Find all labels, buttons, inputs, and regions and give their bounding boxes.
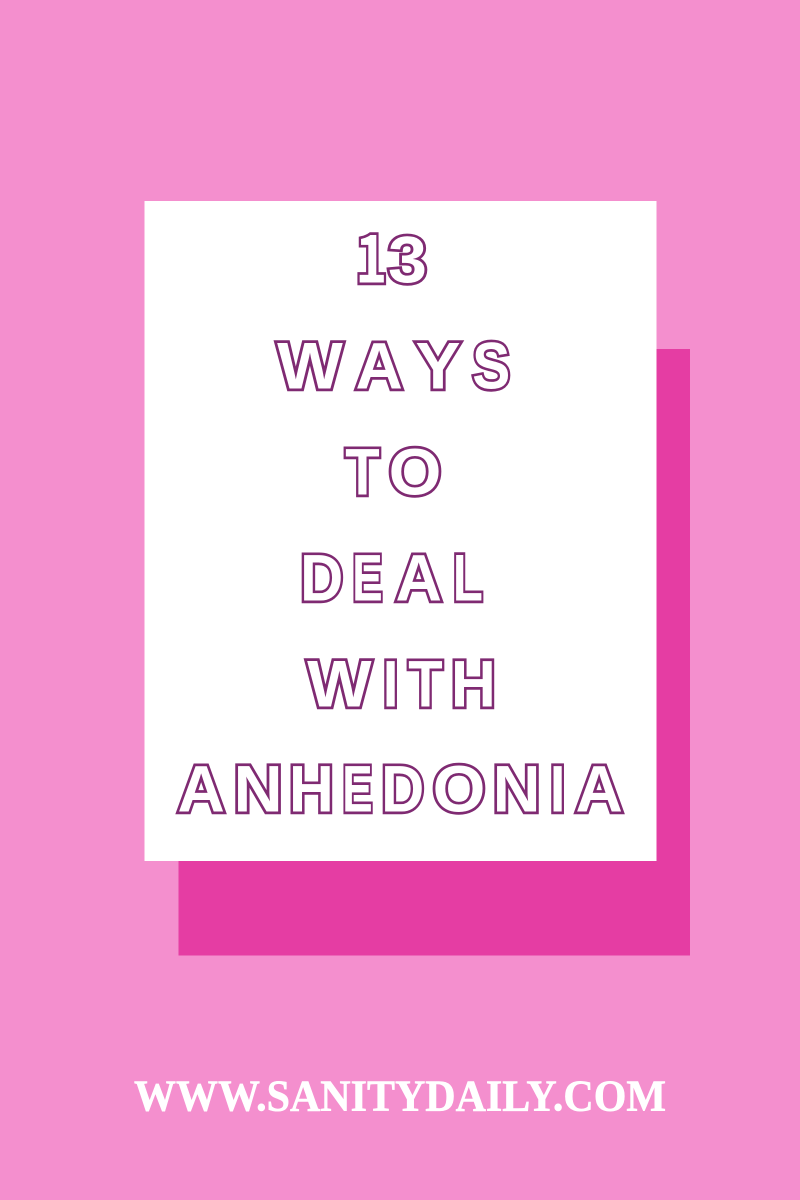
- title line: WITH: W: [307, 646, 372, 720]
- title line: DEAL: A: [396, 540, 442, 614]
- title line: WITH: H: [451, 646, 496, 720]
- title line: ANHEDONIA: H: [289, 752, 334, 826]
- title line: DEAL: L: [453, 540, 483, 614]
- title line: WAYS: A: [356, 328, 403, 402]
- title line: 13: 3: [388, 222, 427, 296]
- title: [178, 210, 623, 826]
- title line: WAYS: S: [472, 328, 510, 402]
- title line: DEAL: E: [352, 540, 383, 614]
- title line: ANHEDONIA: O: [433, 752, 485, 826]
- title line: TO: T: [345, 434, 380, 508]
- white title panel: [144, 201, 656, 861]
- title line: ANHEDONIA: N: [493, 752, 541, 826]
- title line: ANHEDONIA: A: [178, 752, 225, 826]
- title line: 13: 1: [355, 210, 387, 302]
- title line: ANHEDONIA: I: [550, 752, 565, 826]
- title line: ANHEDONIA: D: [381, 752, 424, 826]
- title line: TO: O: [389, 434, 441, 508]
- title line: WAYS: Y: [416, 328, 460, 402]
- title line: ANHEDONIA: E: [342, 752, 373, 826]
- title line: WAYS: W: [277, 328, 344, 402]
- website footer: WWW.SANITYDAILY.COM: [134, 1072, 666, 1120]
- title line: WITH: T: [408, 646, 443, 720]
- title line: WITH: I: [383, 646, 398, 720]
- title line: ANHEDONIA: A: [576, 752, 623, 826]
- offset shadow panel: [178, 349, 690, 956]
- title line: ANHEDONIA: N: [234, 752, 283, 826]
- title line: DEAL: D: [300, 540, 343, 614]
